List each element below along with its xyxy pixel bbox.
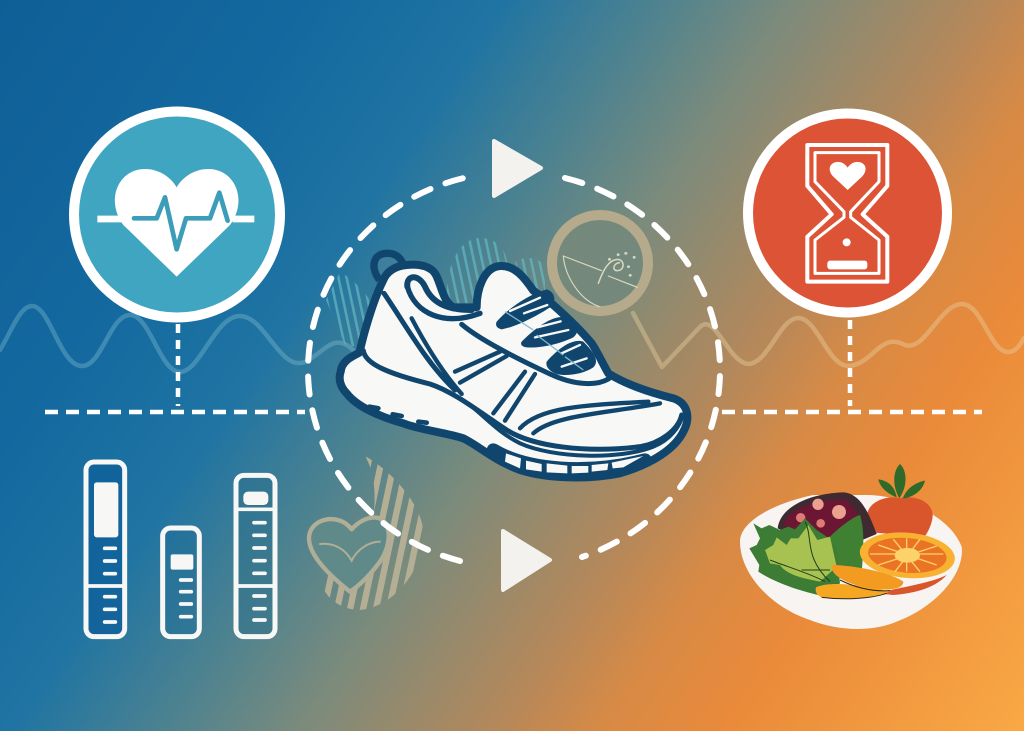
dashed cycle arc left	[308, 177, 470, 561]
hatched heart emblem	[309, 456, 424, 610]
arrow: top cycle	[494, 141, 541, 196]
tomato	[867, 464, 933, 536]
icon: running shoe	[340, 253, 687, 477]
icon: hourglass badge	[748, 114, 947, 312]
hatched shapes behind shoe	[326, 238, 545, 352]
right pulse wave	[633, 304, 1024, 367]
shoe tread blocks	[505, 453, 643, 473]
carrot slices	[816, 565, 903, 599]
orange slice	[858, 529, 957, 595]
tracker bar 2	[163, 528, 199, 637]
icon: bowl of food	[740, 464, 962, 629]
right dashed connector	[722, 410, 982, 414]
shoe laces	[496, 289, 596, 375]
icon: heart rate badge	[74, 112, 280, 318]
right vertical dotted connector	[848, 320, 852, 406]
meat	[778, 492, 877, 553]
magnifier with bowl icon	[552, 215, 648, 311]
left vertical dotted connector	[176, 324, 180, 406]
left dashed connector	[45, 410, 305, 414]
arrow: bottom cycle	[503, 531, 550, 590]
bowl	[740, 495, 962, 629]
left pulse wave	[0, 306, 355, 372]
tracker bar 3	[236, 475, 275, 637]
dashed cycle arc right	[565, 178, 720, 557]
tracker bar 1	[86, 462, 125, 637]
lettuce	[749, 515, 863, 595]
